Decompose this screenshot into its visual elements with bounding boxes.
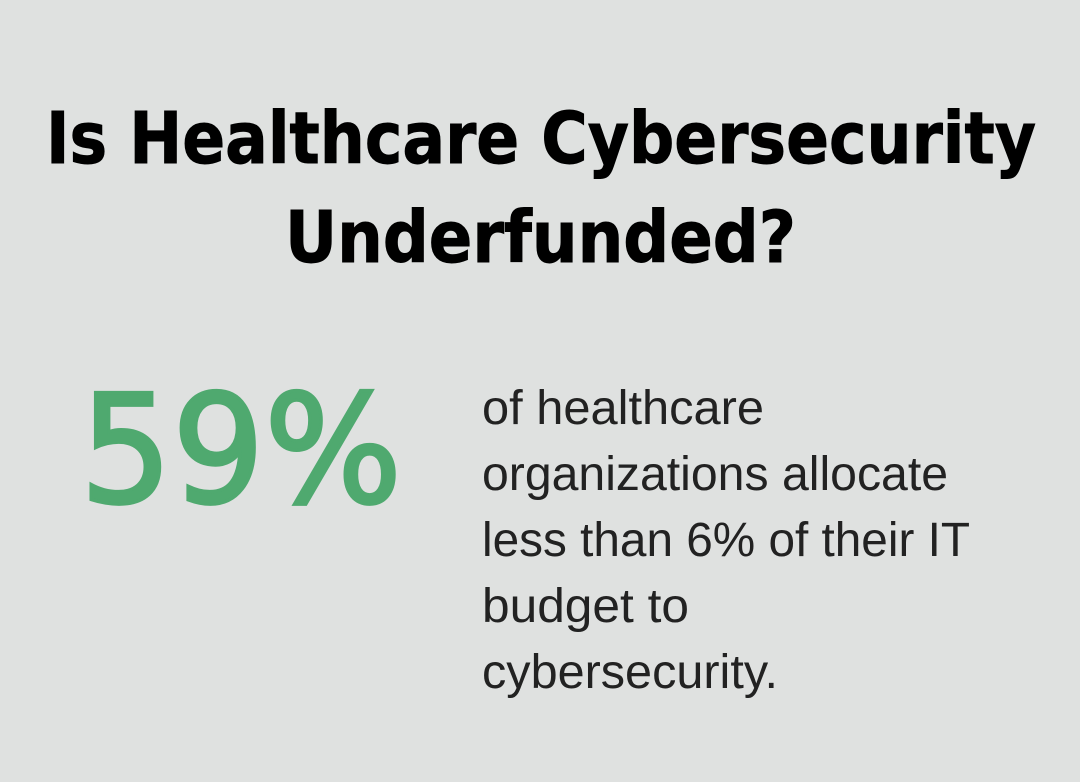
description text: budget to [482,580,689,633]
description text: cybersecurity. [482,646,778,699]
description text: less than 6% of their IT [482,514,970,567]
statistic: 59%: 59% [80,364,402,538]
description text: of healthcare [482,382,764,435]
title [46,97,1036,279]
description text: organizations allocate [482,448,948,501]
description text [482,382,970,699]
title: Underfunded? [285,196,796,279]
